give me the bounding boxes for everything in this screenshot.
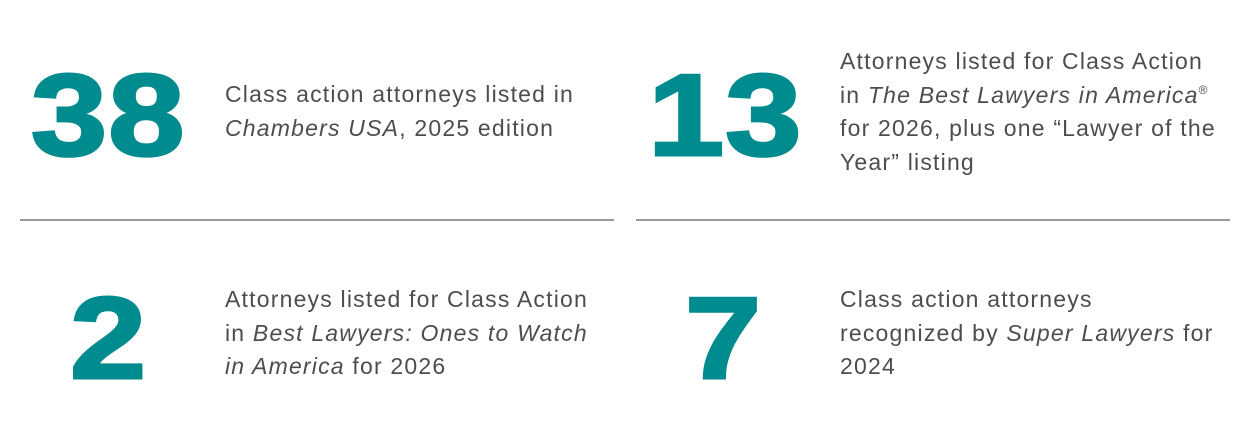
stat 7 number: 7 (685, 273, 762, 403)
stat 2 number: 2 (70, 273, 147, 403)
stat 7 description: 2024 (840, 353, 896, 379)
stat 13 description: in The Best Lawyers in America® (840, 82, 1209, 108)
stat 13 description (840, 48, 1216, 175)
stat 13 description: for 2026, plus one “Lawyer of the (840, 115, 1216, 141)
stat 38 number: 38 (31, 50, 186, 180)
stat 38 description: Class action attorneys listed in (225, 81, 574, 107)
stat 2 description: in America for 2026 (225, 353, 446, 379)
stat 2 description: Attorneys listed for Class Action (225, 286, 588, 312)
stat 2 description (225, 286, 588, 379)
stat 13 description: Attorneys listed for Class Action (840, 48, 1203, 74)
stat 38 description: Chambers USA, 2025 edition (225, 114, 554, 140)
stat 13 number: 13 (648, 50, 803, 180)
stat 13 description: Year” listing (840, 148, 975, 174)
stat 2 description: in Best Lawyers: Ones to Watch (225, 320, 588, 346)
stat 7 description: Class action attorneys (840, 286, 1093, 312)
stat 38 description (225, 81, 574, 140)
stat 7 description: recognized by Super Lawyers for (840, 320, 1213, 346)
stat 7 description (840, 286, 1213, 379)
